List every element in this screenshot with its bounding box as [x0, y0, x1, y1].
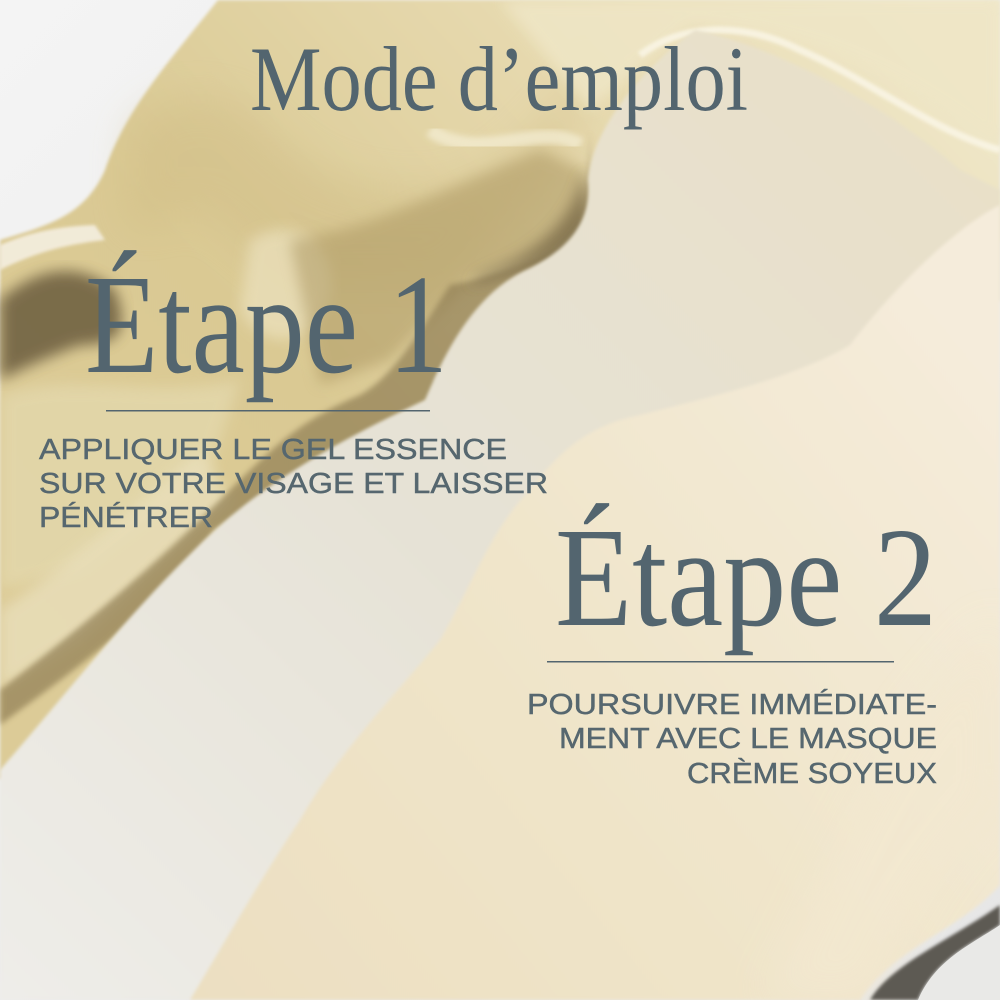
step 1 description: [39, 434, 548, 534]
step 2 description: MENT AVEC LE MASQUE: [559, 723, 937, 755]
step 1 description: APPLIQUER LE GEL ESSENCE: [39, 434, 507, 466]
step 2 description: POURSUIVRE IMMÉDIATE-: [527, 688, 937, 721]
step 1 heading: Étape 1: [85, 245, 448, 403]
step 2 description: [527, 688, 937, 790]
step 1 description: SUR VOTRE VISAGE ET LAISSER: [39, 468, 548, 500]
shadow under gel edge: [0, 130, 590, 725]
bottom right corner shadow: [870, 905, 1000, 1000]
step 2 description: CRÈME SOYEUX: [687, 757, 937, 790]
gel swatch: [0, 0, 1000, 780]
step 1 description: PÉNÉTRER: [39, 501, 213, 534]
title: Mode d’emploi: [250, 28, 748, 130]
step 2 heading: Étape 2: [555, 498, 937, 656]
step 1 divider: [106, 410, 430, 412]
step 2 divider: [547, 661, 894, 662]
step 2: [527, 498, 937, 790]
step 1: [39, 245, 548, 534]
ivory cream swatch: [190, 205, 1000, 1000]
